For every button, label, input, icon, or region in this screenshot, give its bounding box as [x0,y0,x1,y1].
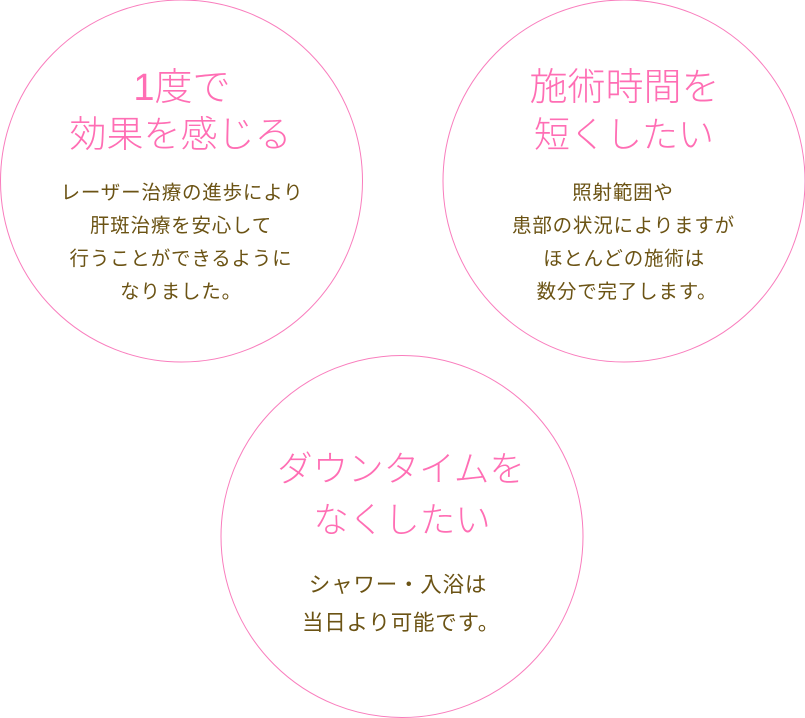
heading: 1度で効果を感じる: 効果を感じる [70,114,292,155]
text block: treatment time description: 患部の状況によりますが [512,215,735,237]
heading: 1度で効果を感じる [70,67,292,155]
heading: 施術時間を短くしたい: 短くしたい [534,114,714,155]
panel: 1度で効果を感じる [0,0,362,362]
panel: ダウンタイムをなくしたい [221,356,583,718]
text block: downtime description [302,573,500,635]
heading: 施術時間を短くしたい: 施術時間を [529,67,720,109]
panel: 施術時間を短くしたい [443,0,805,362]
text block: laser treatment description [61,182,303,303]
heading: ダウンタイムをなくしたい: なくしたい [313,500,491,540]
text block: laser treatment description: レーザー治療の進歩により [61,182,303,204]
text block: laser treatment description: なりました。 [120,281,242,303]
text block: laser treatment description: 肝斑治療を安心して [90,215,272,237]
text block: treatment time description: ほとんどの施術は [543,248,705,270]
text block: downtime description: シャワー・入浴は [309,573,487,597]
text block: laser treatment description: 行うことができるように [70,248,292,270]
text block: treatment time description [512,182,735,303]
heading: ダウンタイムをなくしたい: ダウンタイムを [277,449,525,489]
text block: treatment time description: 照射範囲や [572,182,674,204]
heading: 施術時間を短くしたい [529,67,720,155]
heading: 1度で効果を感じる: 1度で [133,67,231,109]
heading: ダウンタイムをなくしたい [277,449,525,540]
text block: downtime description: 当日より可能です。 [302,611,500,635]
text block: treatment time description: 数分で完了します。 [537,281,717,303]
